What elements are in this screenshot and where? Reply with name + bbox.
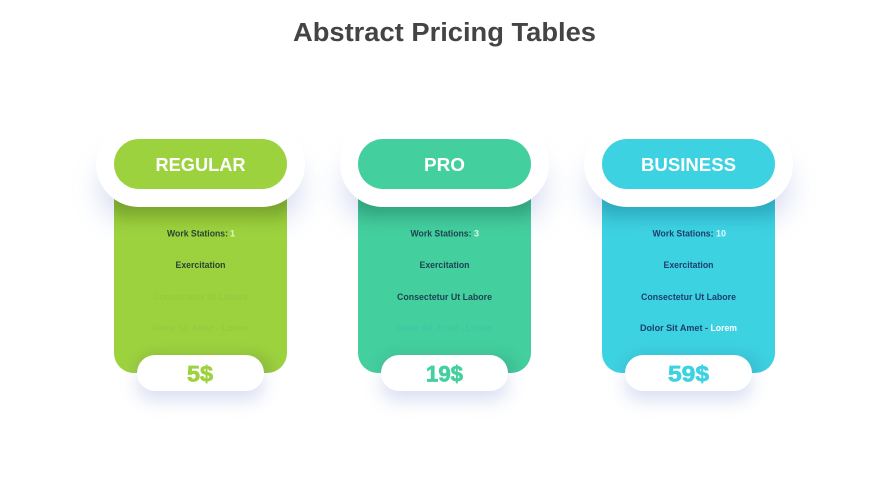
feature list: business: 10 bbox=[716, 228, 726, 238]
feature list: pro: 3 bbox=[474, 228, 479, 238]
feature list: business: Lorem bbox=[710, 323, 737, 333]
card body: pro bbox=[358, 150, 531, 373]
feature list: regular: Exercitation bbox=[176, 260, 226, 270]
header pill: regular bbox=[96, 121, 305, 216]
feature list: business: Exercitation bbox=[664, 260, 714, 270]
price badge: regular bbox=[137, 355, 272, 400]
panel: business plan bbox=[584, 121, 793, 400]
price badge: business: 59$ bbox=[668, 362, 709, 386]
header shadow: regular bbox=[100, 155, 301, 221]
title: Abstract Pricing Tables bbox=[293, 19, 596, 47]
panel: pro plan bbox=[340, 121, 549, 400]
header pill: pro: PRO bbox=[424, 155, 465, 175]
card body: regular bbox=[114, 150, 287, 373]
header pill: business: BUSINESS bbox=[641, 155, 736, 175]
header pill: business bbox=[584, 139, 792, 224]
feature list: business: Work Stations: bbox=[652, 228, 714, 238]
panel: regular plan bbox=[96, 121, 305, 400]
feature list: pro: Dolor Sit Amet - Lorem bbox=[396, 323, 493, 333]
header pill: regular: REGULAR bbox=[156, 155, 246, 175]
feature list: regular: Consectetur Ut Labore bbox=[153, 292, 248, 302]
header shadow: business bbox=[588, 155, 789, 221]
price badge: pro bbox=[381, 355, 516, 400]
feature list: regular: Dolor Sit Amet - Lorem bbox=[152, 323, 249, 333]
feature list: pro: Exercitation bbox=[420, 260, 470, 270]
price badge: pro: 19$ bbox=[426, 362, 463, 386]
feature list: pro bbox=[396, 228, 493, 333]
header shadow: pro bbox=[344, 155, 545, 221]
feature list: regular bbox=[152, 228, 249, 333]
feature list: business: Consectetur Ut Labore bbox=[641, 292, 736, 302]
price badge: business bbox=[625, 355, 760, 400]
feature list: regular: Work Stations: bbox=[167, 228, 228, 238]
price badge: regular: 5$ bbox=[187, 362, 213, 386]
feature list: pro: Work Stations: bbox=[410, 228, 472, 238]
card body: business bbox=[602, 150, 775, 373]
feature list: pro: Consectetur Ut Labore bbox=[397, 292, 492, 302]
header pill: pro bbox=[340, 139, 548, 224]
feature list: regular: 1 bbox=[230, 228, 235, 238]
feature list: business bbox=[640, 228, 737, 333]
feature list: business: Dolor Sit Amet - bbox=[640, 323, 708, 333]
